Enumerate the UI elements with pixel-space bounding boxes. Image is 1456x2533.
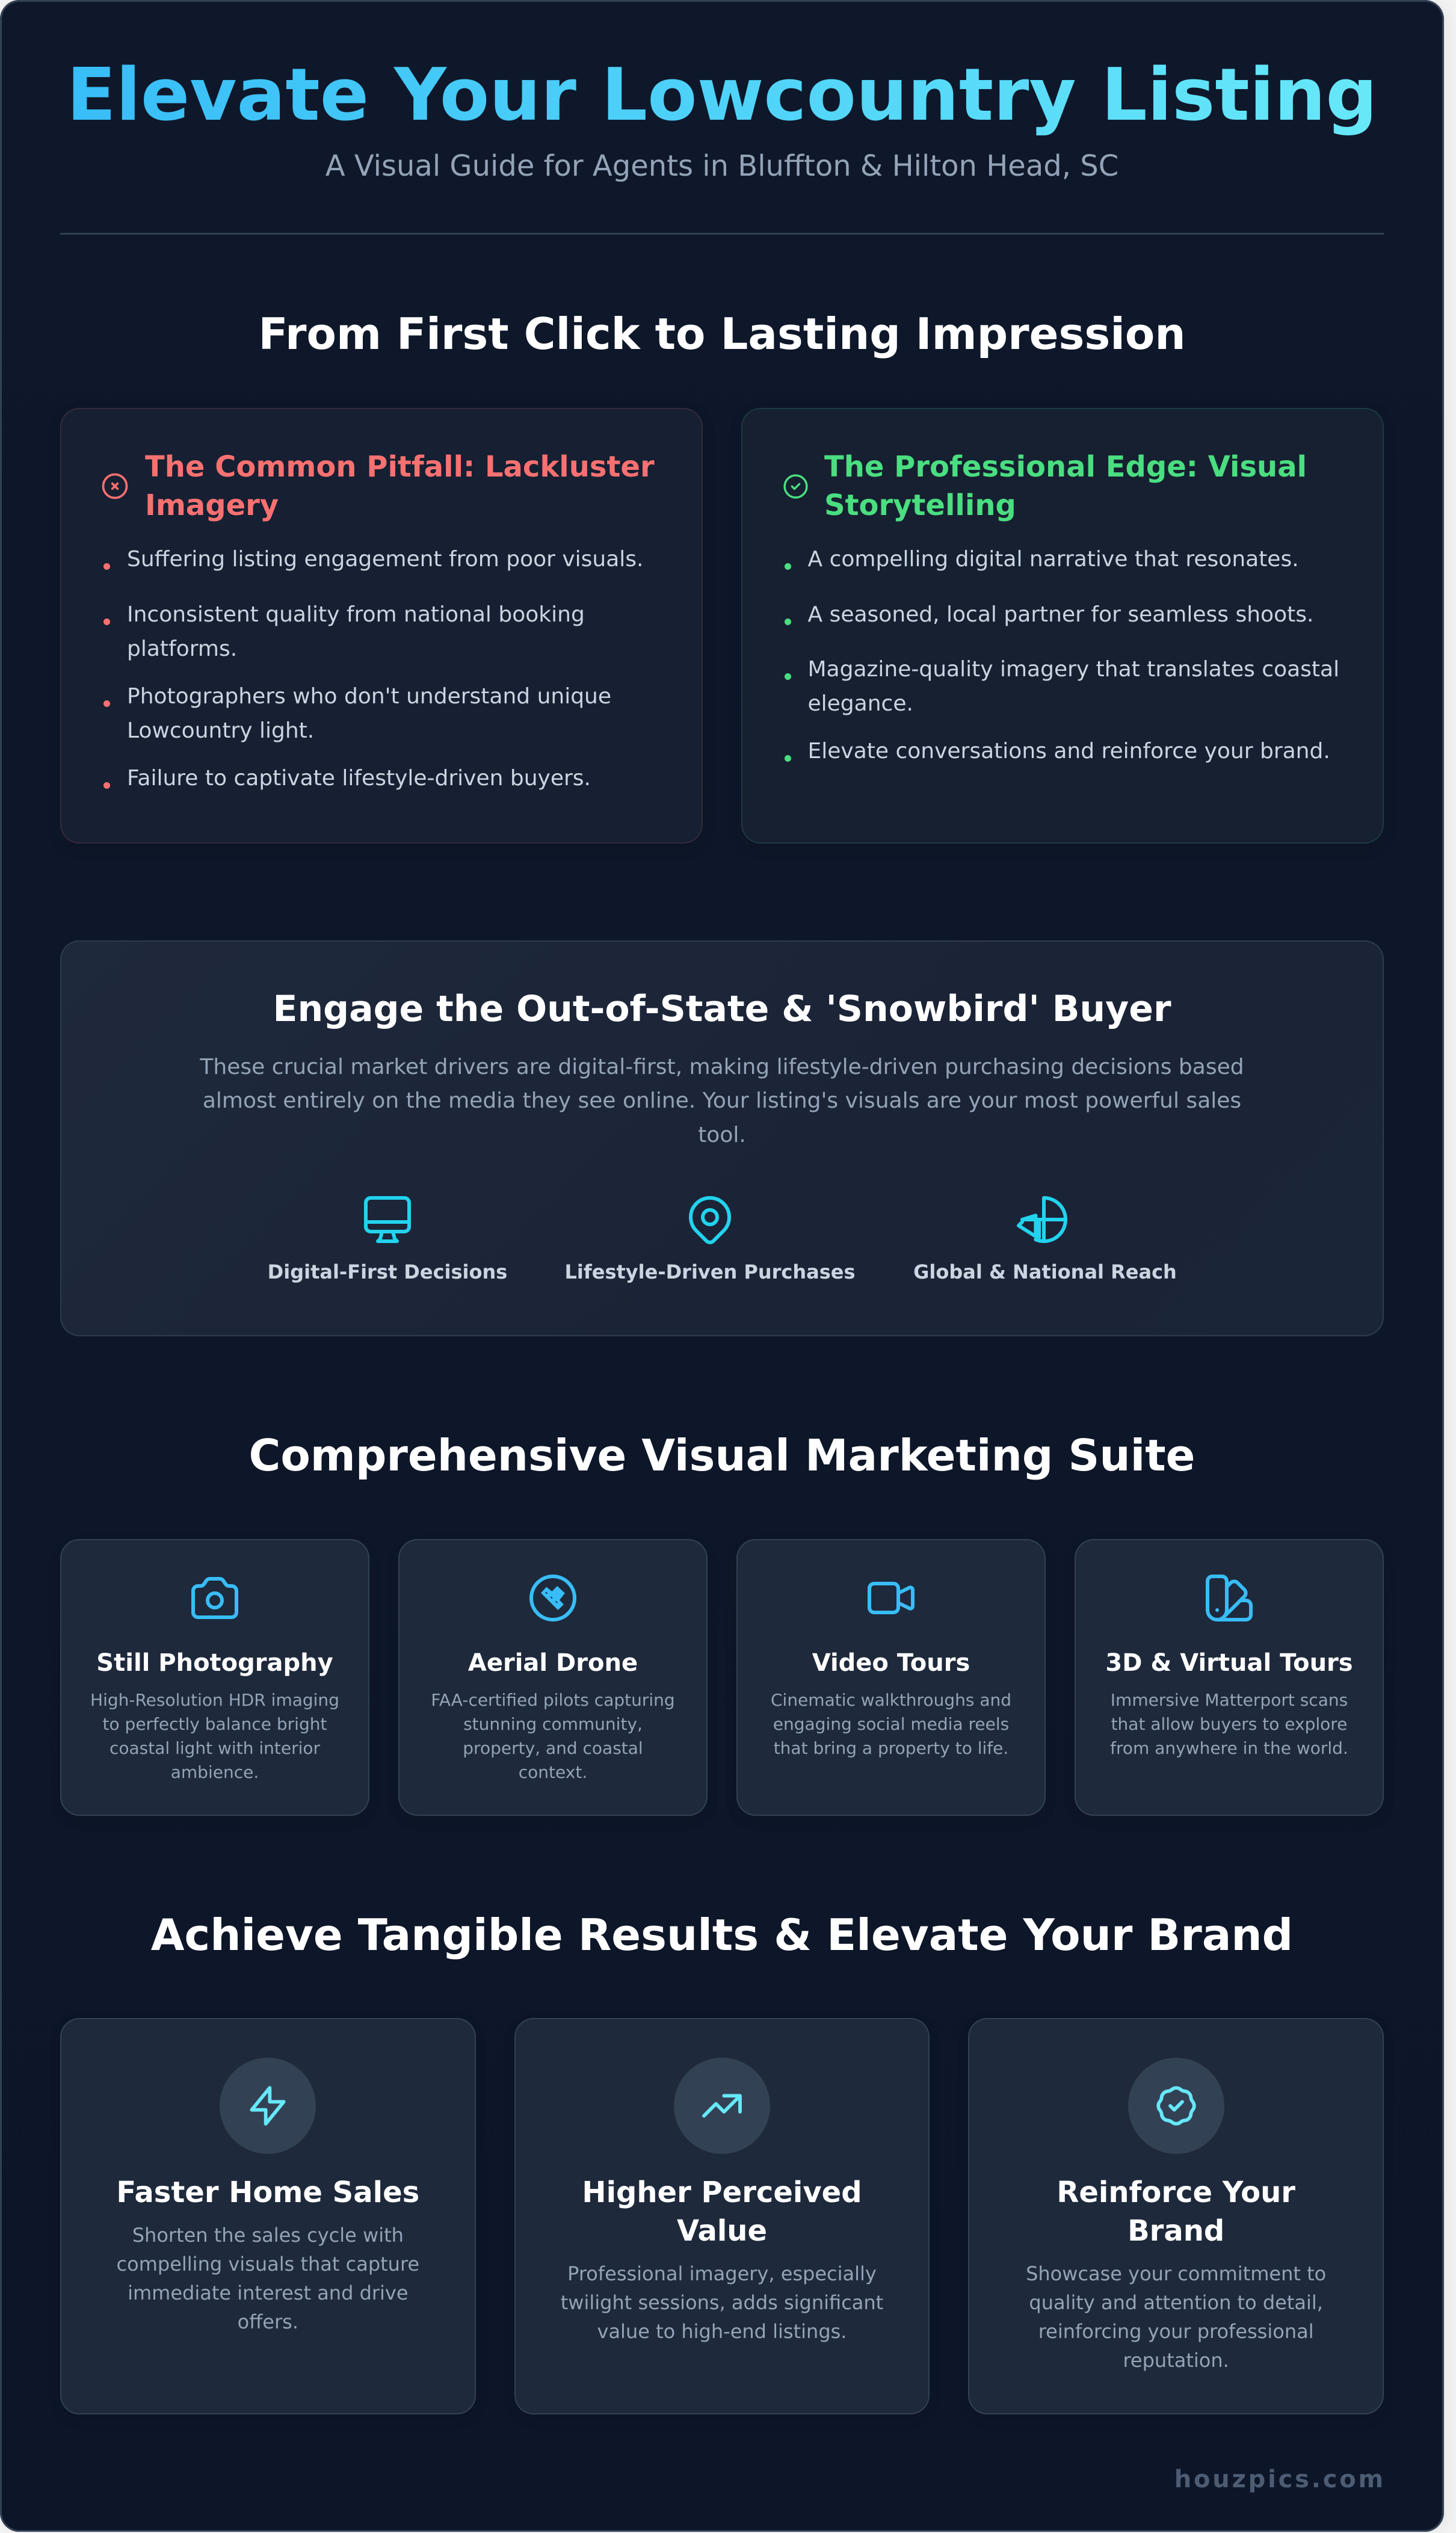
feature: digital first <box>268 1196 507 1283</box>
service card: still photography: ambience. <box>171 1762 259 1782</box>
service card: 3d virtual tours: Immersive Matterport scans <box>1111 1690 1348 1710</box>
feature: global reach: Global & National Reach <box>913 1260 1177 1283</box>
result card: perceived value <box>514 2018 930 2414</box>
service card: aerial drone: FAA-certified pilots capturing <box>431 1690 675 1710</box>
snowbird paragraph: These crucial market drivers are digital-first, making lifestyle-driven purchasing decisions based <box>200 1055 1244 1079</box>
service card: aerial drone: stunning community, <box>463 1714 643 1734</box>
result card: reinforce brand <box>968 2018 1384 2414</box>
result card: reinforce brand: Showcase your commitment to <box>1026 2262 1326 2285</box>
pitfall heading: The Common Pitfall: Lackluster <box>145 450 655 484</box>
feature: digital first: Digital-First Decisions <box>268 1260 507 1283</box>
result card: perceived value: Higher Perceived <box>582 2176 862 2209</box>
heading: marketing suite: Comprehensive Visual Marketing Suite <box>248 1430 1195 1481</box>
service card: still photography: High-Resolution HDR imaging <box>90 1690 339 1710</box>
service card: 3d virtual tours: 3D & Virtual Tours <box>1105 1649 1353 1677</box>
professional item 4: Elevate conversations and reinforce your brand. <box>807 739 1330 764</box>
snowbird heading: Engage the Out-of-State & 'Snowbird' Buyer <box>273 988 1171 1030</box>
service card: 3d virtual tours: from anywhere in the world. <box>1110 1738 1348 1758</box>
professional heading <box>824 450 1307 522</box>
feature: lifestyle driven <box>564 1196 856 1283</box>
professional heading: Storytelling <box>824 489 1016 522</box>
result card: perceived value: value to high-end listings. <box>597 2320 847 2343</box>
result card: perceived value: twilight sessions, adds significant <box>561 2291 883 2314</box>
service card: aerial drone: Aerial Drone <box>468 1649 638 1677</box>
result card: faster home sales: Shorten the sales cycle with <box>132 2224 404 2247</box>
result card: faster home sales <box>60 2018 476 2414</box>
icon: badge check <box>1128 2058 1224 2154</box>
result card: perceived value: Professional imagery, especially <box>567 2262 877 2285</box>
professional item 3 <box>785 657 1339 716</box>
professional heading: The Professional Edge: Visual <box>824 450 1307 484</box>
panel: common pitfall <box>60 408 703 844</box>
service card: video tours <box>736 1539 1046 1816</box>
result card: perceived value: Value <box>677 2214 767 2248</box>
result card: reinforce brand: reputation. <box>1123 2349 1229 2372</box>
service card: aerial drone <box>398 1539 708 1816</box>
pitfall item 2 <box>103 602 585 661</box>
result card: faster home sales: immediate interest and drive <box>128 2282 409 2304</box>
title: Elevate Your Lowcountry Listing <box>67 53 1377 137</box>
service card: still photography: Still Photography <box>96 1649 333 1677</box>
service card: aerial drone: property, and coastal <box>463 1738 643 1758</box>
icon: monitor <box>364 1196 411 1243</box>
icon: check circle <box>783 474 808 499</box>
icon: swatch <box>1206 1575 1253 1621</box>
pitfall item 2: platforms. <box>127 637 237 661</box>
pitfall item 1: Suffering listing engagement from poor visuals. <box>127 547 644 572</box>
result card: faster home sales: offers. <box>238 2310 298 2333</box>
icon: lightning bolt <box>220 2058 316 2154</box>
service card: aerial drone: context. <box>519 1762 587 1782</box>
result card: reinforce brand: Reinforce Your <box>1057 2176 1295 2209</box>
service card: video tours: Video Tours <box>812 1649 970 1677</box>
professional item 3: elegance. <box>807 691 913 716</box>
professional item 1: A compelling digital narrative that resonates. <box>807 547 1299 572</box>
feature: global reach <box>913 1196 1177 1283</box>
result card: reinforce brand: Brand <box>1127 2214 1224 2248</box>
panel: snowbird buyer <box>60 940 1384 1336</box>
professional item 2: A seasoned, local partner for seamless shoots. <box>807 602 1313 627</box>
service card: video tours: engaging social media reels <box>773 1714 1009 1734</box>
snowbird paragraph <box>200 1055 1244 1147</box>
icon: video camera <box>868 1582 915 1614</box>
result card: reinforce brand: quality and attention to detail, <box>1029 2291 1323 2314</box>
snowbird paragraph: tool. <box>698 1123 746 1147</box>
pitfall item 2: Inconsistent quality from national booking <box>127 602 585 627</box>
service card: 3d virtual tours <box>1075 1539 1384 1816</box>
subtitle: A Visual Guide for Agents in Bluffton & Hilton Head, SC <box>325 149 1118 183</box>
service card: video tours: that bring a property to life. <box>774 1738 1008 1758</box>
service card: video tours: Cinematic walkthroughs and <box>771 1690 1011 1710</box>
icon: camera <box>191 1577 238 1619</box>
service card: 3d virtual tours: that allow buyers to explore <box>1111 1714 1347 1734</box>
result card: faster home sales: Faster Home Sales <box>116 2176 419 2209</box>
pitfall heading: Imagery <box>145 489 279 522</box>
pitfall heading <box>145 450 655 522</box>
icon: trending up <box>674 2058 770 2154</box>
feature: lifestyle driven: Lifestyle-Driven Purchases <box>564 1260 856 1283</box>
pitfall item 3 <box>103 684 611 743</box>
result card: reinforce brand: reinforcing your professional <box>1038 2320 1314 2343</box>
service card: still photography <box>60 1539 369 1816</box>
footer brand: houzpics.com <box>1174 2466 1386 2493</box>
professional item 3: Magazine-quality imagery that translates coastal <box>807 657 1339 682</box>
icon: globe <box>1017 1196 1067 1243</box>
service card: still photography: to perfectly balance bright <box>103 1714 327 1734</box>
result card: faster home sales: compelling visuals that capture <box>117 2253 419 2275</box>
heading: tangible results: Achieve Tangible Results & Elevate Your Brand <box>151 1910 1293 1960</box>
icon: location pin <box>689 1196 731 1244</box>
pitfall item 3: Photographers who don't understand unique <box>127 684 611 709</box>
heading: first click: From First Click to Lasting Impression <box>258 309 1186 359</box>
service card: still photography: coastal light with interior <box>110 1738 320 1758</box>
icon: x circle <box>102 473 128 499</box>
pitfall item 3: Lowcountry light. <box>127 718 314 743</box>
icon: drone <box>529 1575 576 1621</box>
pitfall item 4: Failure to captivate lifestyle-driven buyers. <box>127 766 591 791</box>
panel: professional edge <box>741 408 1384 844</box>
snowbird paragraph: almost entirely on the media they see online. Your listing's visuals are your most powerful sales <box>203 1088 1241 1113</box>
